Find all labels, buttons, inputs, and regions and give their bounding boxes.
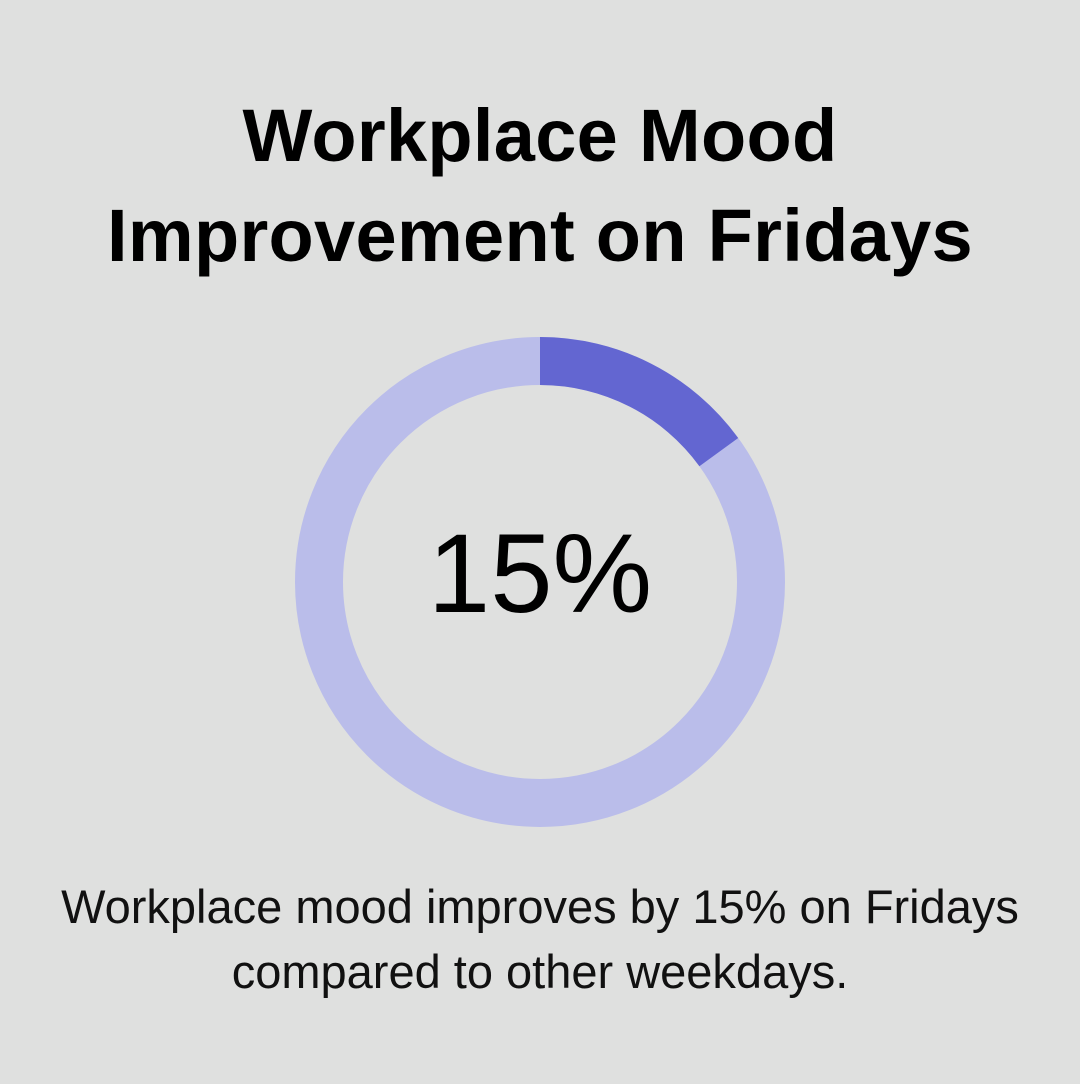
caption: Workplace mood improves by 15% on Fridays [61, 880, 1019, 933]
caption: compared to other weekdays. [232, 945, 848, 998]
title: Workplace Mood [243, 94, 837, 177]
caption [61, 880, 1019, 998]
highlighted segment 15% [540, 337, 738, 466]
center value: 15% [428, 511, 652, 636]
title [107, 94, 973, 277]
title: Improvement on Fridays [107, 194, 973, 277]
ring background [319, 361, 761, 803]
